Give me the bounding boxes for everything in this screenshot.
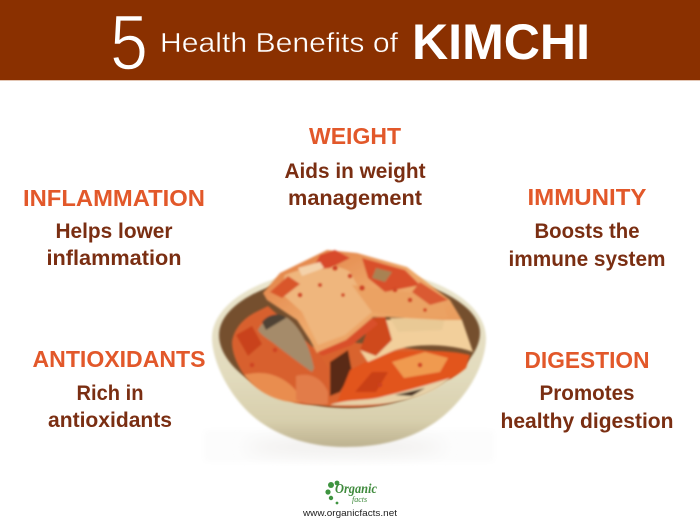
kimchi bowl illustration xyxy=(204,250,494,462)
benefit: weight: Aids in weight xyxy=(284,160,426,183)
grey outer leaf xyxy=(258,316,314,372)
benefit: antioxidants: ANTIOXIDANTS xyxy=(32,346,206,372)
red sauce along top xyxy=(312,250,350,270)
kimchi xyxy=(232,250,473,407)
benefit: digestion xyxy=(500,347,674,433)
benefit: weight: management xyxy=(288,187,422,210)
benefit: inflammation xyxy=(23,185,205,270)
benefit: antioxidants: antioxidants xyxy=(48,409,172,432)
website URL: www.organicfacts.net xyxy=(302,508,397,519)
right pale leaves xyxy=(360,318,473,362)
benefit: immunity: IMMUNITY xyxy=(528,184,646,210)
Organic Facts logo xyxy=(302,481,397,519)
logo wordmark: Organic xyxy=(335,482,378,497)
benefit: digestion: healthy digestion xyxy=(500,410,674,433)
benefit: immunity xyxy=(508,184,666,271)
lower carrots xyxy=(336,351,470,405)
benefit: weight: WEIGHT xyxy=(309,123,401,149)
benefit: digestion: DIGESTION xyxy=(524,347,650,373)
left leaf pile xyxy=(232,306,332,405)
benefit: antioxidants xyxy=(32,346,206,432)
top slab xyxy=(263,250,462,353)
icon: leaf swirl xyxy=(325,481,339,504)
benefit: antioxidants: Rich in xyxy=(76,382,144,405)
logo subtitle: facts xyxy=(352,495,367,504)
dark gap xyxy=(330,350,352,396)
benefit: inflammation: Helps lower xyxy=(56,220,172,243)
benefit: digestion: Promotes xyxy=(540,382,634,405)
bowl xyxy=(212,268,486,447)
benefit: inflammation: inflammation xyxy=(46,247,182,270)
title KIMCHI: KIMCHI xyxy=(412,14,590,70)
benefit: immunity: immune system xyxy=(508,248,666,271)
header banner xyxy=(0,0,700,86)
bottom filler xyxy=(245,340,470,407)
title text: Health Benefits of xyxy=(160,27,398,58)
pale cabbage bottom xyxy=(330,378,450,405)
benefit: immunity: Boosts the xyxy=(534,220,640,243)
sauce speckles xyxy=(250,266,427,387)
title number 5: 5 xyxy=(110,0,148,86)
benefit: inflammation: INFLAMMATION xyxy=(23,185,205,211)
benefit: weight xyxy=(284,123,426,210)
